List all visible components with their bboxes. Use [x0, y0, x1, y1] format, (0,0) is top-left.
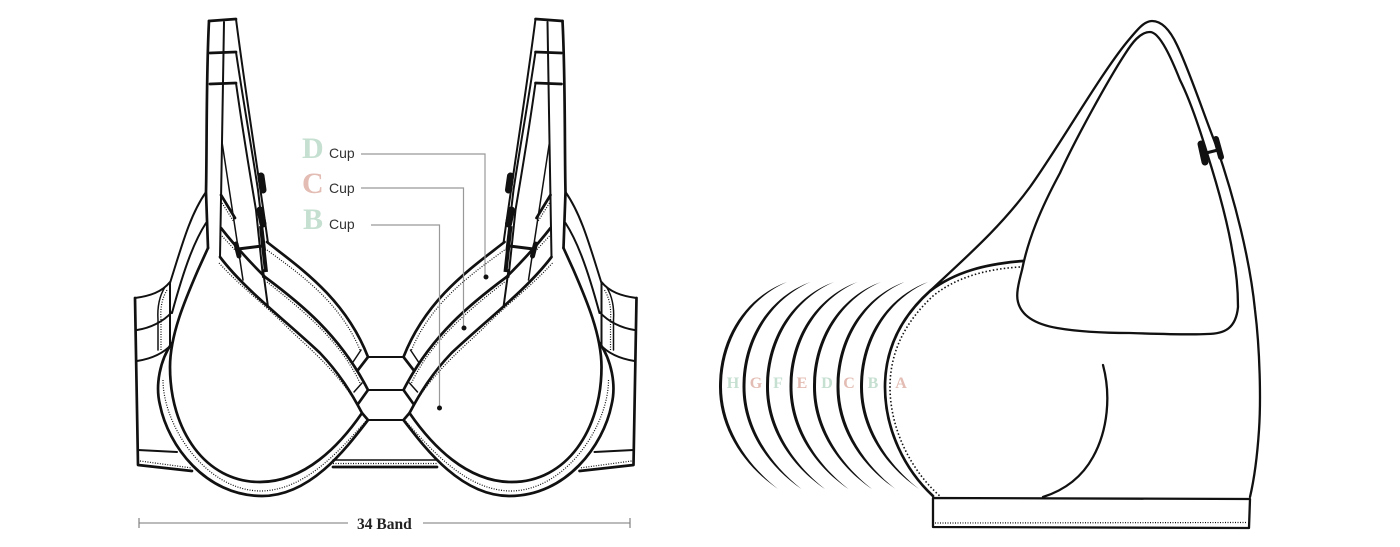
cup size letters: E	[797, 375, 807, 392]
C cup label: C	[302, 167, 324, 200]
right back band wings	[566, 192, 636, 471]
right half of bra	[404, 19, 636, 496]
right straps	[504, 19, 566, 307]
B cup leader line	[371, 225, 442, 410]
front view bra diagram	[135, 19, 636, 496]
left strap sliders	[236, 176, 266, 272]
strap slider	[1201, 139, 1221, 162]
C cup label	[302, 167, 355, 200]
D cup label: Cup	[329, 145, 355, 161]
left straps	[206, 19, 268, 307]
C cup layer	[221, 228, 368, 404]
cup size letters: H	[727, 375, 740, 392]
armhole	[1017, 32, 1238, 334]
right strap sliders	[506, 176, 536, 272]
right B cup front	[404, 248, 613, 496]
strap and body outline	[930, 21, 1260, 497]
cup size callouts	[302, 132, 488, 410]
right C cup layer	[404, 228, 550, 404]
B cup label	[303, 203, 355, 236]
cup size letters: D	[821, 375, 833, 392]
D cup label	[302, 132, 355, 165]
B cup label: Cup	[329, 216, 355, 232]
side view bra diagram	[719, 21, 1260, 528]
left half of bra	[135, 19, 368, 496]
centre gore bands	[333, 357, 437, 467]
under band	[933, 498, 1250, 528]
D cup label: D	[302, 132, 324, 165]
cup size letters: F	[773, 375, 783, 392]
cup size arcs	[719, 282, 928, 489]
cup size letters: C	[843, 375, 855, 392]
cup size letters: G	[750, 375, 763, 392]
D cup leader line	[361, 154, 488, 280]
band label: 34 Band	[357, 516, 412, 533]
bust profile	[885, 261, 1107, 497]
right D cup layer	[404, 195, 550, 370]
left back band wings	[135, 192, 206, 471]
D cup layer	[221, 195, 368, 370]
B cup label: B	[303, 203, 323, 236]
band width measure	[139, 516, 630, 533]
C cup leader line	[361, 188, 466, 330]
C cup label: Cup	[329, 180, 355, 196]
B cup front	[158, 248, 368, 496]
cup size letters: B	[868, 375, 879, 392]
cup size letters	[727, 375, 907, 392]
cup size letters: A	[895, 375, 907, 392]
